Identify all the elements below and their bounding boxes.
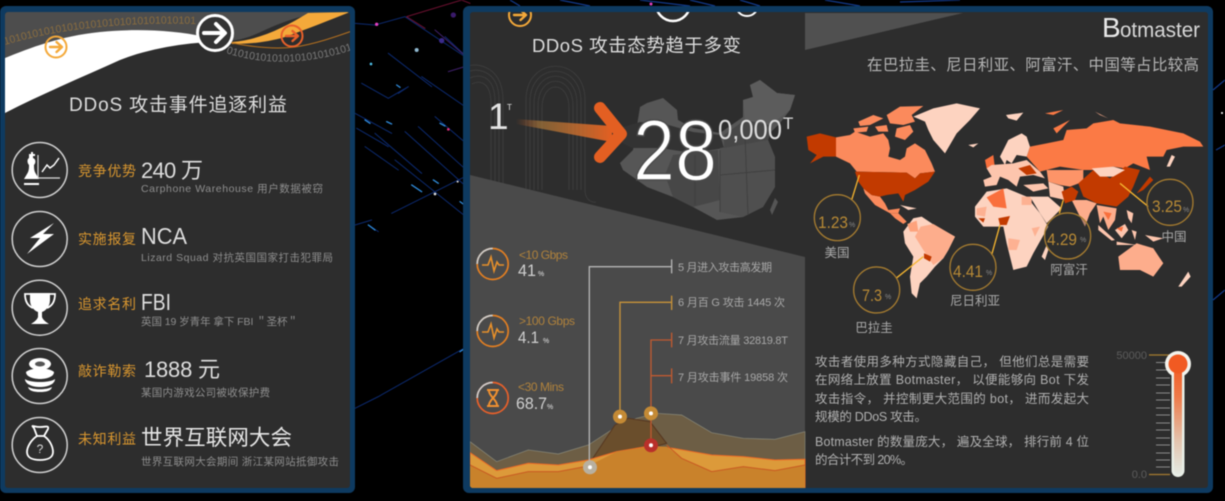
callout: China: 中国 [1161, 229, 1187, 244]
big number: 280,000T: 28 [633, 103, 717, 199]
text block: description: Botmaster 的数量庞大， 遍及全球， 排行前 4 位 [815, 434, 1089, 449]
callout: Paraguay: % [885, 294, 891, 301]
row: retaliation [12, 212, 333, 266]
map: China [620, 80, 795, 220]
callout: Nigeria: 4.41 [953, 262, 983, 281]
row: extortion: 敲诈勒索 [78, 363, 136, 379]
callout: Nigeria [950, 262, 1000, 308]
map: world [807, 103, 1203, 298]
stat: over 100 Gbps: 4.1 [518, 328, 539, 347]
callout: Afghanistan [1047, 230, 1088, 277]
stat: under 30 minutes: % [547, 404, 554, 411]
chart markers [583, 406, 658, 474]
big number: 280,000T: 0,000 [718, 114, 782, 145]
top background lines [510, 0, 1225, 300]
gauge: 50000 [1116, 350, 1147, 362]
row: competitive advantage [12, 142, 323, 198]
panel: left DDoS profit motives [0, 6, 356, 494]
event labels: 5 月进入攻击高发期 [678, 260, 772, 274]
callout: Afghanistan: % [1080, 237, 1086, 244]
Oceania [1118, 243, 1163, 277]
heading: B [1102, 12, 1121, 43]
lower gray slanted section [470, 175, 805, 488]
row: unknown benefit: ? [37, 442, 44, 456]
text block: description: 攻击者使用多种方式隐藏自己， 但他们总是需要 [815, 354, 1089, 369]
stat: under 10 Gbps [477, 248, 568, 280]
text block: description: 在网络上放置 Botmaster， 以便能够向 Bot 下发 [815, 372, 1089, 387]
Eurasia [1027, 120, 1203, 172]
callout: USA [818, 213, 855, 260]
panel: DDoS trends [465, 0, 805, 488]
row: competitive advantage: Carphone Warehouse 用户数据被窃 [141, 182, 323, 195]
row: unknown benefit [12, 418, 339, 472]
row: extortion [12, 348, 270, 404]
arrow: 1T to 280000T [516, 108, 621, 157]
gauge [1116, 350, 1191, 481]
heading [1102, 12, 1200, 43]
row: retaliation: Lizard Squad 对抗英国国家打击犯罪局 [141, 251, 333, 264]
header swoosh [4, 11, 350, 114]
row: fame: 英国 19 岁青年 拿下 FBI ＂圣杯＂ [141, 315, 298, 328]
callout: Afghanistan: 4.29 [1047, 230, 1077, 249]
map callouts [814, 175, 1193, 313]
stat: under 30 minutes: <30 Mins [518, 380, 564, 394]
callout: China [1152, 197, 1189, 244]
callout: Paraguay [855, 286, 893, 335]
row: unknown benefit: 未知利益 [78, 431, 136, 447]
callout: China: % [1183, 207, 1189, 214]
text block: description: 攻击指令， 并控制更大范围的 bot， 进而发起大 [815, 391, 1089, 406]
callout: USA: % [849, 222, 855, 229]
stat: under 10 Gbps: <10 Gbps [519, 248, 568, 262]
row: unknown benefit: 世界互联网大会 [141, 426, 292, 450]
area chart [470, 259, 805, 488]
stat: over 100 Gbps: % [543, 338, 550, 345]
big number: 1T [490, 102, 512, 130]
gauge: 0.0 [1132, 469, 1147, 481]
stat: under 10 Gbps: 41 [518, 261, 536, 280]
South America [903, 217, 955, 298]
event labels: 6 月百 G 攻击 1445 次 [678, 295, 785, 309]
callout: China: 3.25 [1152, 197, 1182, 216]
event labels [678, 260, 788, 384]
panel: Botmaster [805, 12, 1203, 481]
big number: 280,000T: T [783, 114, 793, 133]
big number: 1T: 1 [488, 96, 509, 137]
big number: 280,000T [636, 116, 794, 182]
icon: orange arrow circle [282, 26, 302, 46]
callout: USA: 1.23 [818, 213, 848, 232]
callout: Paraguay: 巴拉圭 [855, 320, 893, 335]
stat: over 100 Gbps [477, 314, 575, 347]
heading: DDoS 攻击事件追逐利益 [69, 94, 287, 116]
row: fame [12, 280, 298, 335]
callout: Paraguay: 7.3 [862, 286, 882, 305]
text block: description [815, 354, 1089, 467]
text block: description: 的合计不到 20%。 [815, 452, 913, 467]
event labels: 7 月攻击流量 32819.8T [678, 333, 788, 347]
arches decoration [471, 65, 590, 200]
row: competitive advantage: 240 万 [141, 158, 203, 183]
leader lines [589, 259, 672, 463]
Africa [975, 188, 1048, 270]
callout: Nigeria: % [986, 270, 992, 277]
icon: white arrow circle [198, 16, 232, 50]
callout: Afghanistan: 阿富汗 [1050, 262, 1088, 277]
row: fame: 追求名利 [78, 296, 136, 312]
cropped arrow circles [507, 11, 758, 28]
callout: USA: 美国 [824, 246, 850, 260]
row: retaliation: NCA [141, 223, 188, 249]
heading: otmaster [1120, 19, 1200, 42]
text block: description: 规模的 DDoS 攻击。 [815, 409, 927, 424]
callout: Nigeria: 尼日利亚 [950, 294, 1000, 308]
row: extortion: 某国内游戏公司被收保护费 [141, 386, 270, 399]
big number: 1T: T [507, 103, 512, 112]
stat: under 10 Gbps: % [538, 271, 545, 278]
panel: right frame [463, 6, 1213, 493]
gray corner triangle [805, 13, 963, 50]
row: unknown benefit: 世界互联网大会期间 浙江某网站抵御攻击 [141, 455, 339, 468]
row: retaliation: 实施报复 [78, 231, 136, 247]
row: extortion: 1888 元 [144, 357, 220, 382]
subtitle: 在巴拉圭、尼日利亚、阿富汗、中国等占比较高 [867, 56, 1199, 74]
icon: gold arrow circle [46, 36, 66, 58]
stat: under 30 minutes: 68.7 [516, 394, 547, 413]
row: competitive advantage: 竞争优势 [78, 163, 136, 179]
background network lines [355, 0, 470, 408]
stat: over 100 Gbps: >100 Gbps [519, 314, 575, 328]
event labels: 7 月攻击事件 19858 次 [678, 370, 788, 384]
row: fame: FBI [141, 289, 171, 315]
stat: under 30 minutes [477, 380, 564, 414]
heading: DDoS 攻击态势趋于多变 [532, 35, 741, 56]
